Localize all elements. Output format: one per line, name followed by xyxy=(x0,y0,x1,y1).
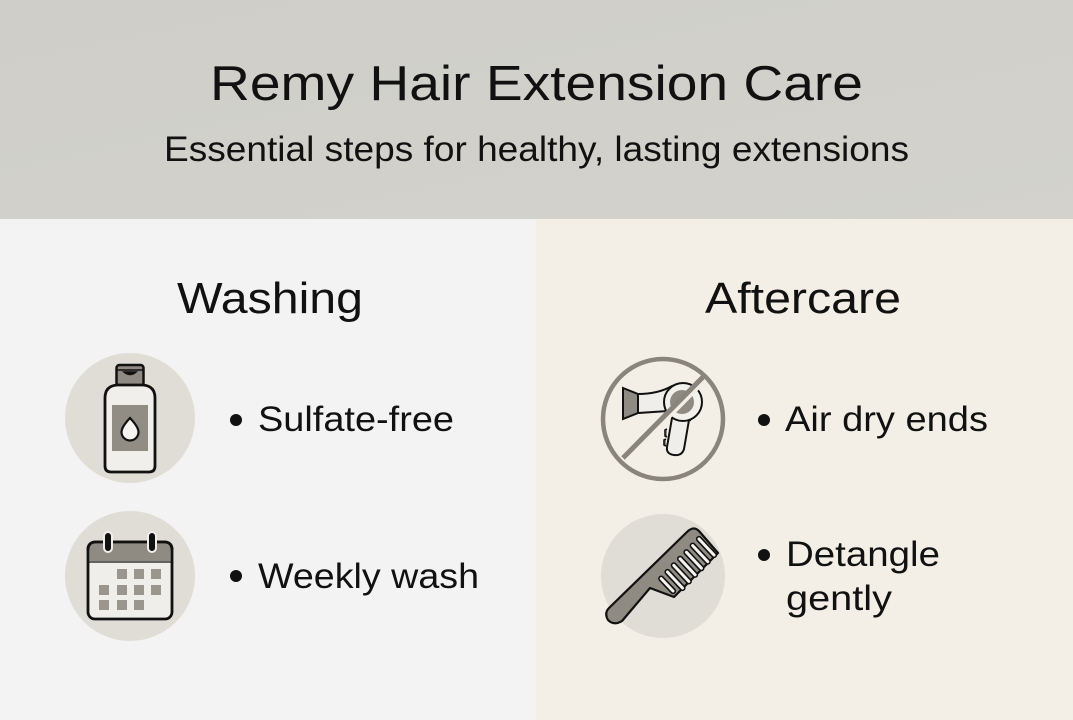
subtitle: Essential steps for healthy, lasting extensions xyxy=(164,130,909,169)
icon: no hair dryer xyxy=(603,359,723,479)
panel: washing xyxy=(0,219,536,720)
icon: calendar xyxy=(65,511,195,641)
bullet item: air dry ends: Air dry ends xyxy=(785,400,988,439)
heading: aftercare: Aftercare xyxy=(705,274,901,323)
title: Remy Hair Extension Care xyxy=(210,57,863,111)
panel: header xyxy=(0,0,1073,219)
bullet item: detangle gently xyxy=(758,535,940,618)
bullet item: sulfate-free: Sulfate-free xyxy=(258,400,454,439)
bullet item: detangle gently: Detangle xyxy=(786,535,940,574)
icon: shampoo bottle xyxy=(65,353,195,483)
bullet item: detangle gently: gently xyxy=(786,579,893,618)
panel: aftercare xyxy=(536,219,1073,720)
bullet item: weekly wash: Weekly wash xyxy=(258,557,479,596)
heading: washing: Washing xyxy=(177,274,363,323)
icon: comb xyxy=(601,514,725,638)
